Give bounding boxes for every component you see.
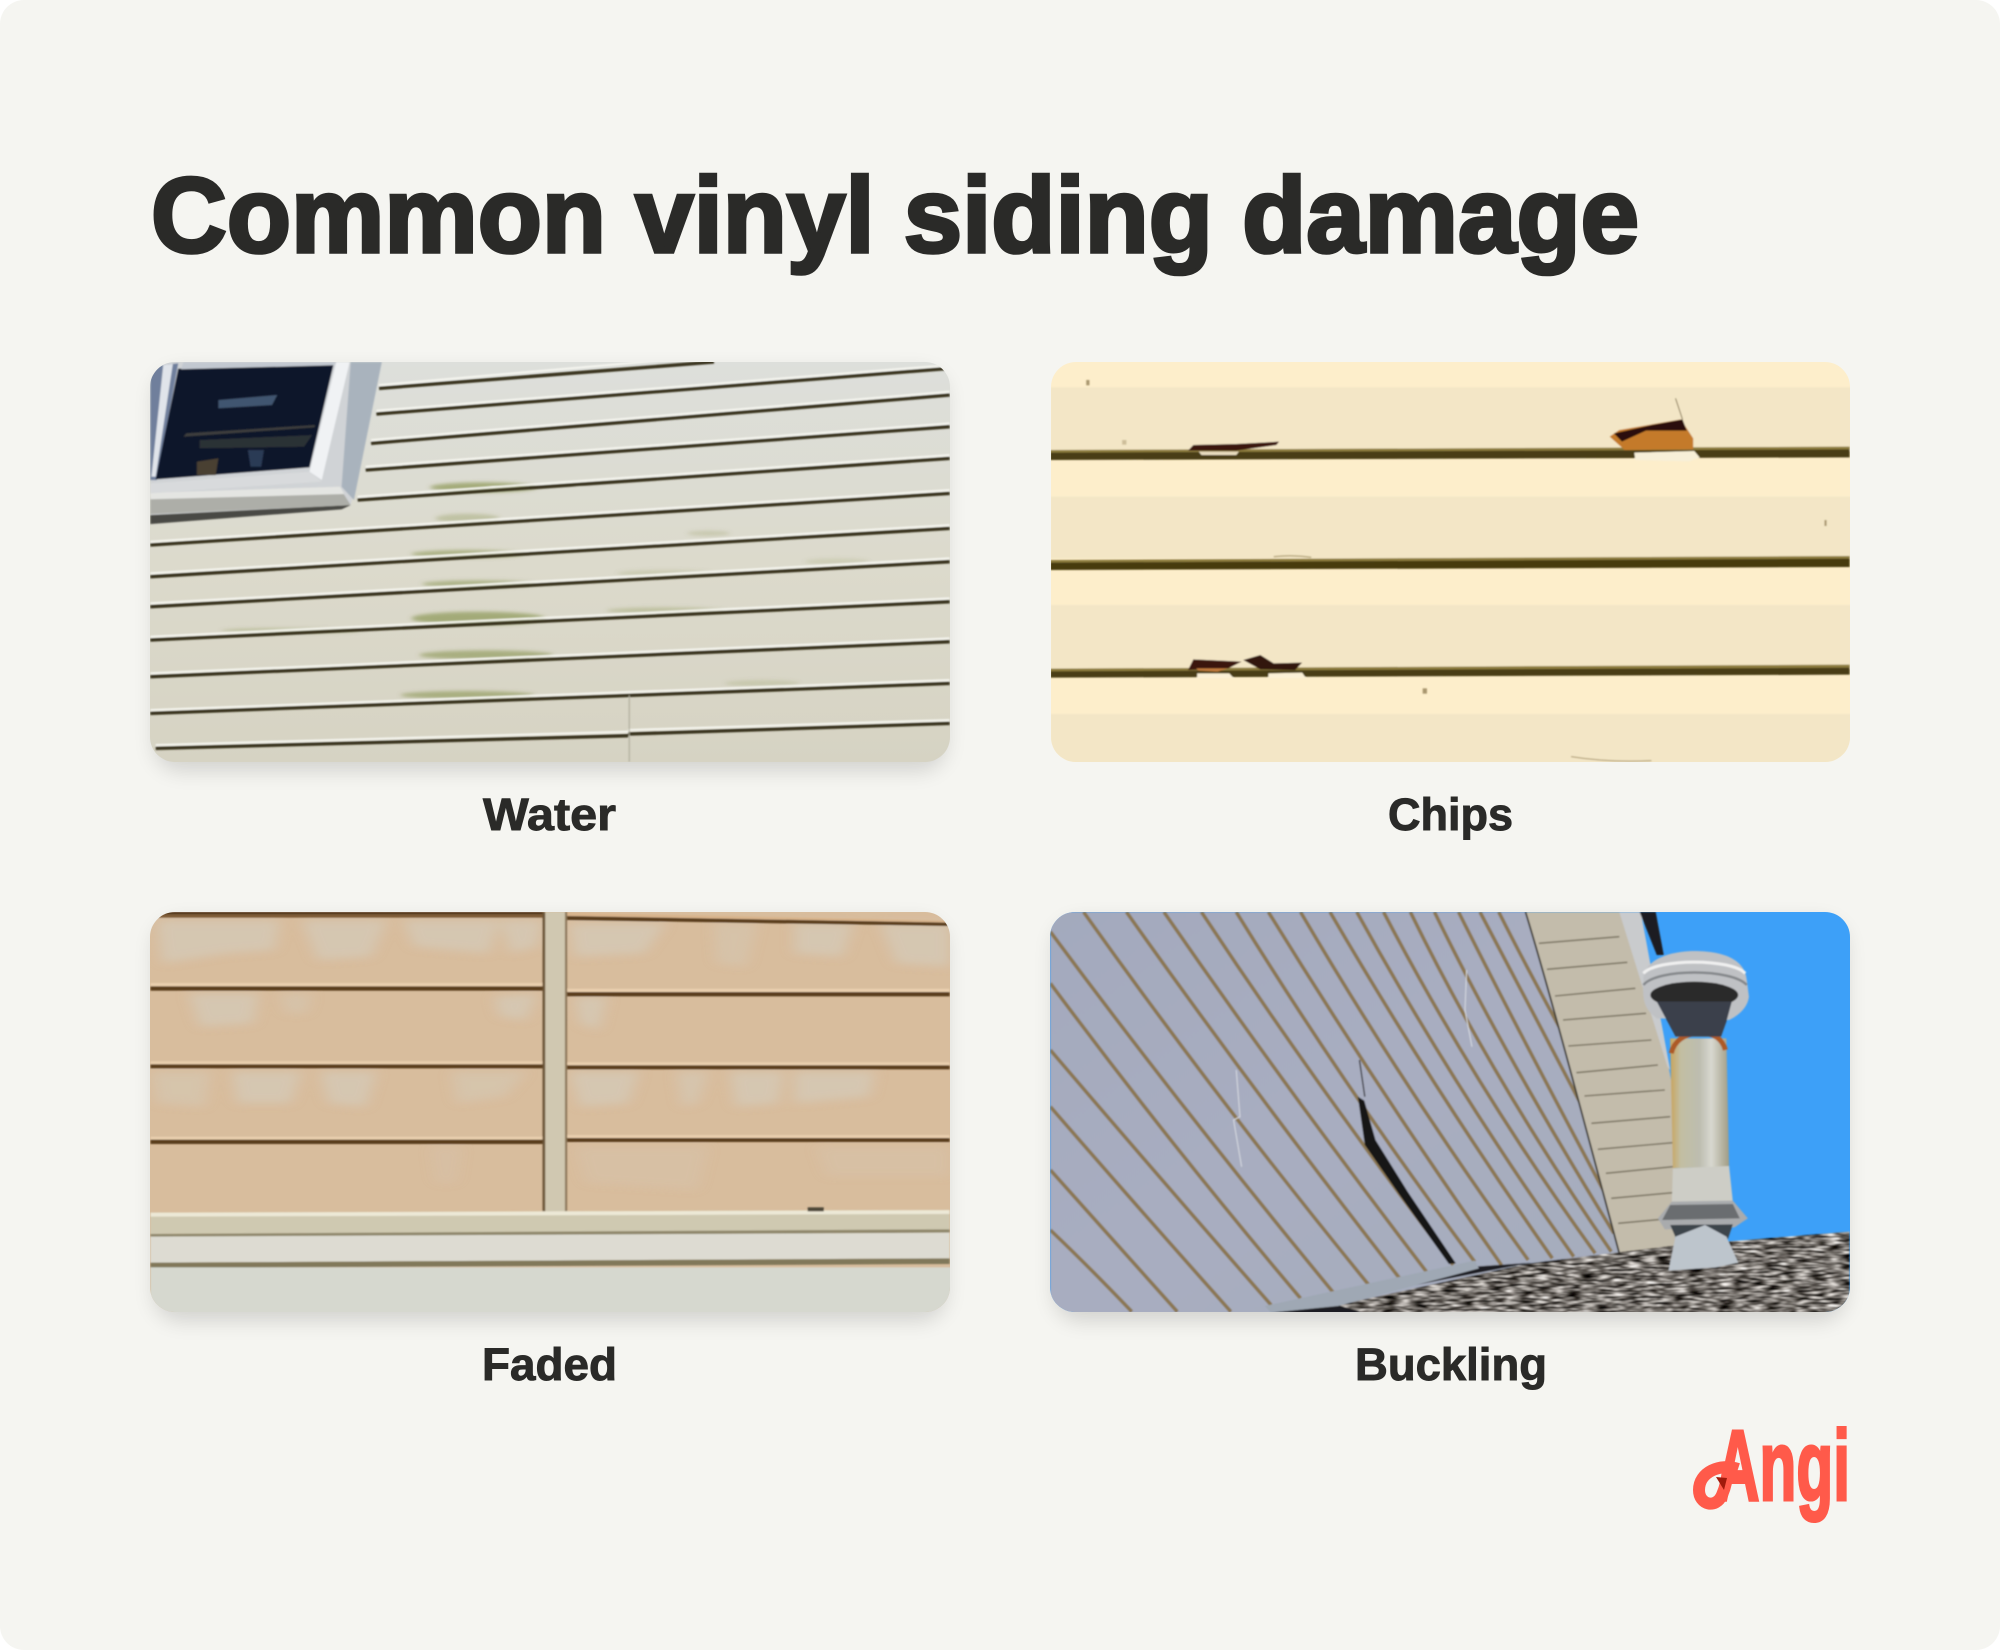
logo: Angi — [1699, 1410, 1850, 1522]
fascia and gutter — [1619, 912, 1670, 1070]
faded patches — [150, 917, 950, 1145]
label: Water: Water — [483, 789, 616, 840]
small marks — [1086, 380, 1827, 694]
panel: buckling damage — [1050, 912, 1850, 1390]
roof — [1298, 1232, 1850, 1314]
logo: Angi: Angi — [1716, 1410, 1850, 1522]
photo: water-stained siding — [150, 360, 950, 762]
siding bands — [1050, 387, 1851, 763]
siding lines — [150, 912, 950, 1144]
siding wall — [1050, 912, 1619, 1314]
panel: water damage — [150, 360, 950, 840]
photo: buckled siding — [1050, 912, 1850, 1315]
label: Faded: Faded — [482, 1339, 617, 1390]
horizontal trim — [150, 1214, 950, 1234]
buckle crack — [1358, 1097, 1456, 1264]
vertical trim — [542, 912, 546, 1212]
panel: faded damage — [150, 912, 951, 1390]
vent pipe — [1670, 1038, 1729, 1168]
chip top right — [1610, 419, 1693, 450]
moss — [221, 482, 869, 699]
siding diagonal lines — [1050, 912, 1614, 1312]
panel: chips damage — [1050, 362, 1851, 840]
label: Buckling: Buckling — [1355, 1339, 1547, 1390]
photo: faded siding — [150, 912, 951, 1314]
title: Common vinyl siding damage — [151, 155, 1639, 275]
chip left bottom — [1188, 659, 1242, 670]
photo: chipped siding — [1050, 362, 1851, 763]
white band — [150, 1233, 950, 1263]
siding highlights — [150, 360, 950, 745]
fold flashing — [1260, 1263, 1531, 1315]
siding grooves — [1050, 447, 1850, 678]
window — [151, 362, 352, 516]
chip left top — [1188, 442, 1279, 451]
siding shadow lines — [150, 362, 950, 748]
soffit — [1523, 912, 1676, 1257]
label: Chips: Chips — [1388, 789, 1513, 840]
